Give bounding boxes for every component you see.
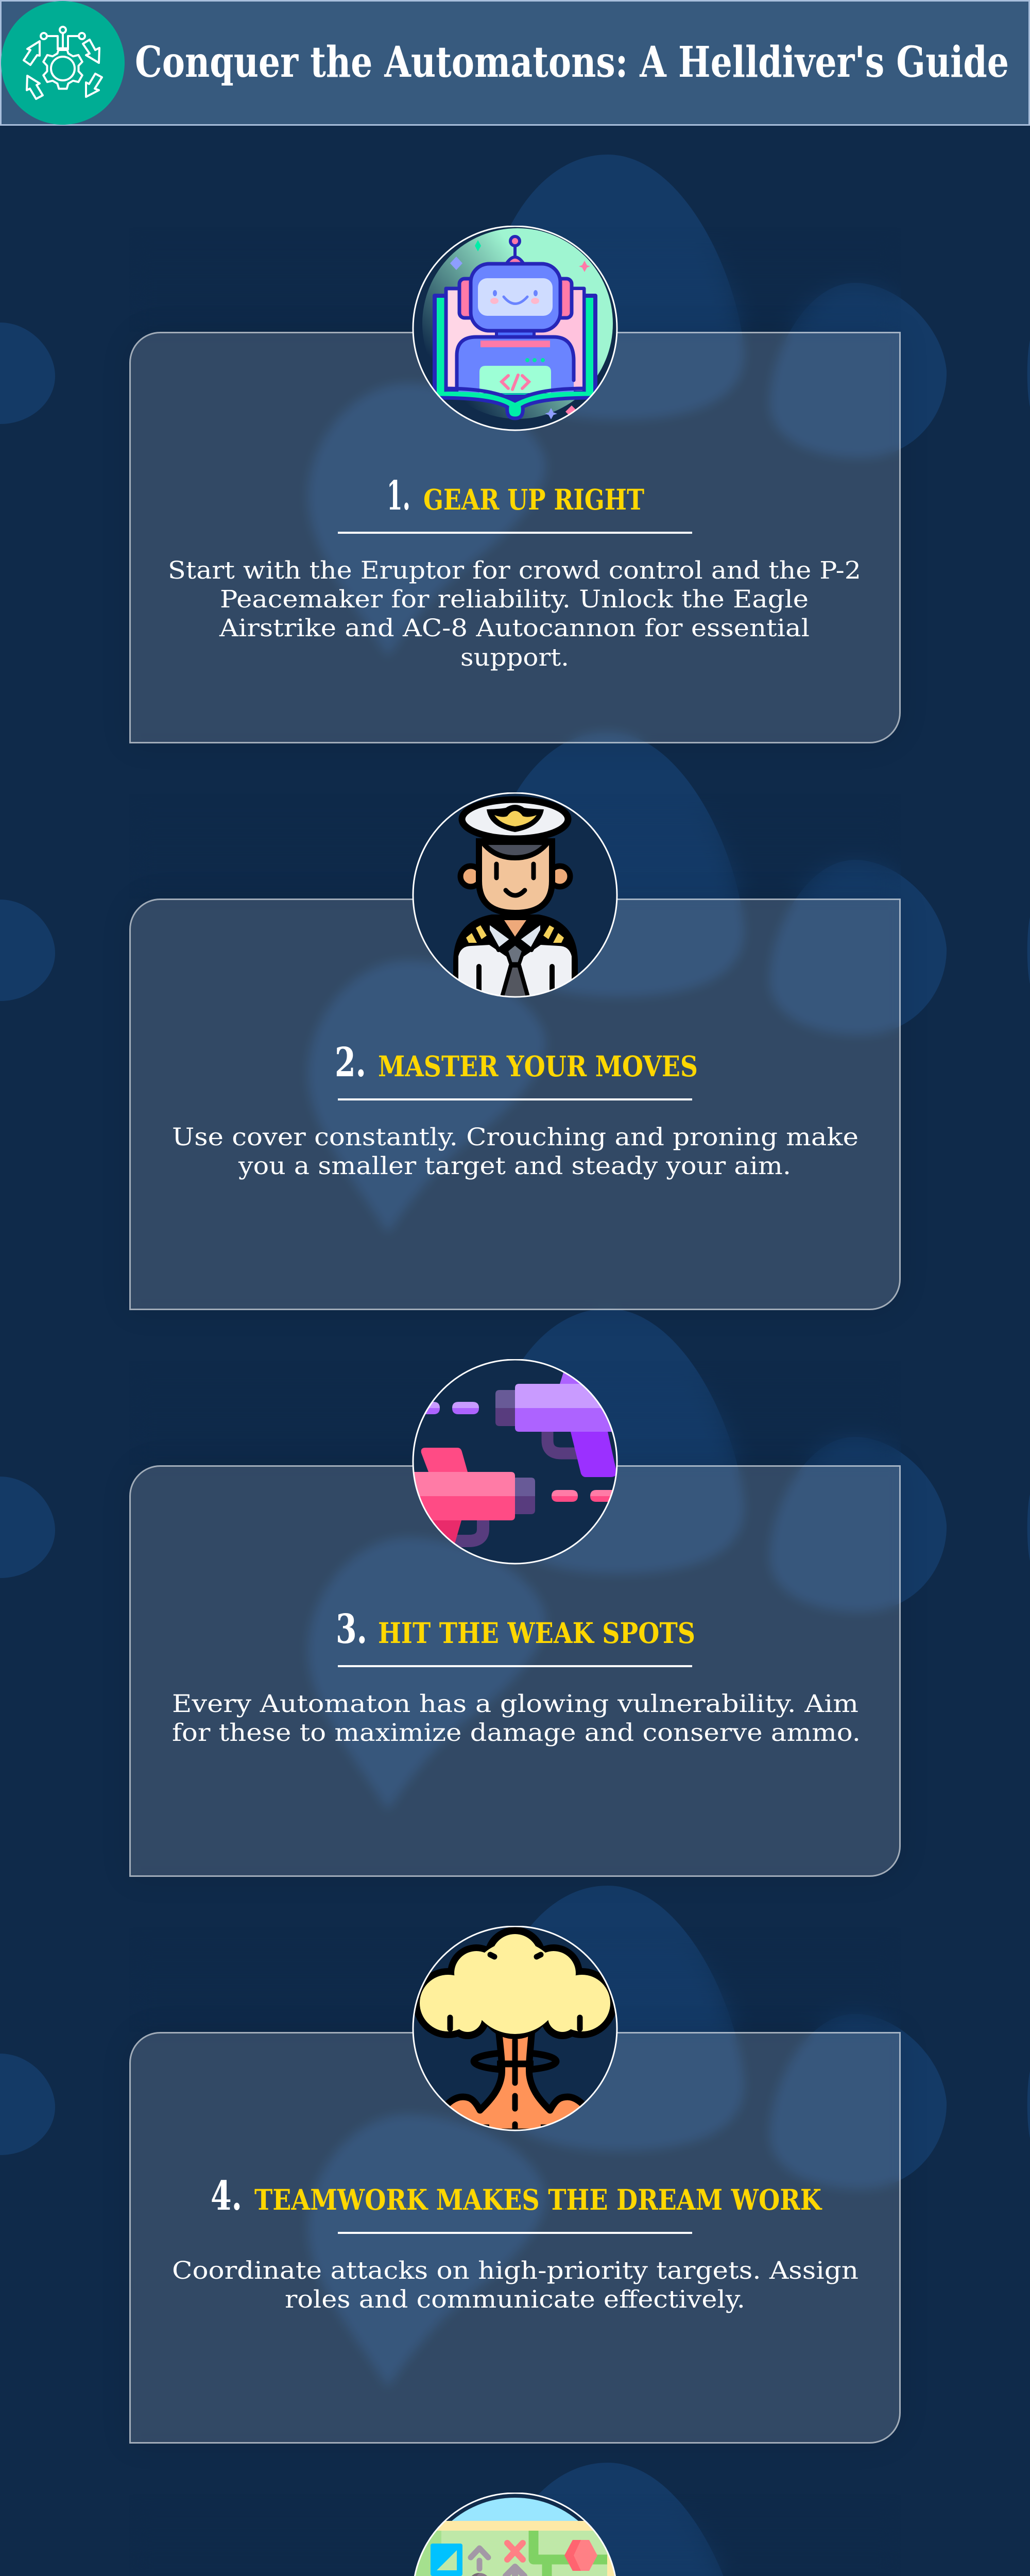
header bar: [0, 0, 1030, 126]
heading: [336, 1606, 695, 1653]
heading: [211, 2173, 822, 2219]
heading: 4.: [211, 2173, 242, 2219]
body text: [168, 556, 861, 672]
heading: [335, 1039, 698, 1086]
heading: 1.: [387, 472, 410, 519]
body text: Every Automaton has a glowing vulnerability. Aim: [172, 1690, 859, 1718]
body text: you a smaller target and steady your aim.: [238, 1152, 791, 1180]
body text: [172, 2257, 859, 2314]
icon: robot on open book: [412, 226, 618, 431]
heading: [387, 472, 644, 519]
text block: step 2: [172, 792, 859, 1180]
panel: step 5 plan your extraction: [414, 2493, 723, 2576]
body text: support.: [460, 643, 569, 672]
card 2 background: [129, 899, 901, 1310]
panel: step 2 master your moves: [129, 792, 901, 1310]
heading: MASTER YOUR MOVES: [378, 1049, 698, 1083]
body text: Peacemaker for reliability. Unlock the Eagle: [220, 585, 809, 614]
heading: HIT THE WEAK SPOTS: [378, 1616, 695, 1650]
text block: step 1: [168, 226, 861, 672]
heading: TEAMWORK MAKES THE DREAM WORK: [254, 2183, 822, 2216]
card 1 background: [129, 332, 901, 743]
body text: roles and communicate effectively.: [285, 2285, 745, 2314]
text block: step 5: [420, 2493, 609, 2576]
text block: step 3: [172, 1359, 861, 1747]
body text: Coordinate attacks on high-priority targets. Assign: [172, 2257, 859, 2285]
heading: 3.: [336, 1606, 367, 1653]
body text: [172, 1123, 859, 1180]
icon: pilot: [412, 792, 618, 997]
body text: Airstrike and AC-8 Autocannon for essential: [219, 614, 810, 642]
heading: 2.: [335, 1039, 366, 1086]
icon: two blasters: [412, 1359, 618, 1564]
header logo: teal gear icon: [1, 1, 125, 125]
card 3 background: [129, 1465, 901, 1877]
panel: step 3 hit the weak spots: [129, 1359, 901, 1877]
heading: GEAR UP RIGHT: [423, 483, 644, 516]
icon: mushroom cloud explosion: [412, 1926, 618, 2131]
body text: Use cover constantly. Crouching and proning make: [172, 1123, 859, 1151]
text block: step 4: [172, 1926, 859, 2314]
body text: [172, 1690, 861, 1747]
body text: for these to maximize damage and conserve ammo.: [172, 1719, 861, 1747]
body text: Start with the Eruptor for crowd control and the P-2: [168, 556, 861, 585]
panel: step 4 teamwork: [129, 1926, 901, 2444]
icon: tactical map: [414, 2493, 616, 2576]
card 4 background: [129, 2032, 901, 2444]
panel: step 1 gear up right: [129, 226, 901, 743]
